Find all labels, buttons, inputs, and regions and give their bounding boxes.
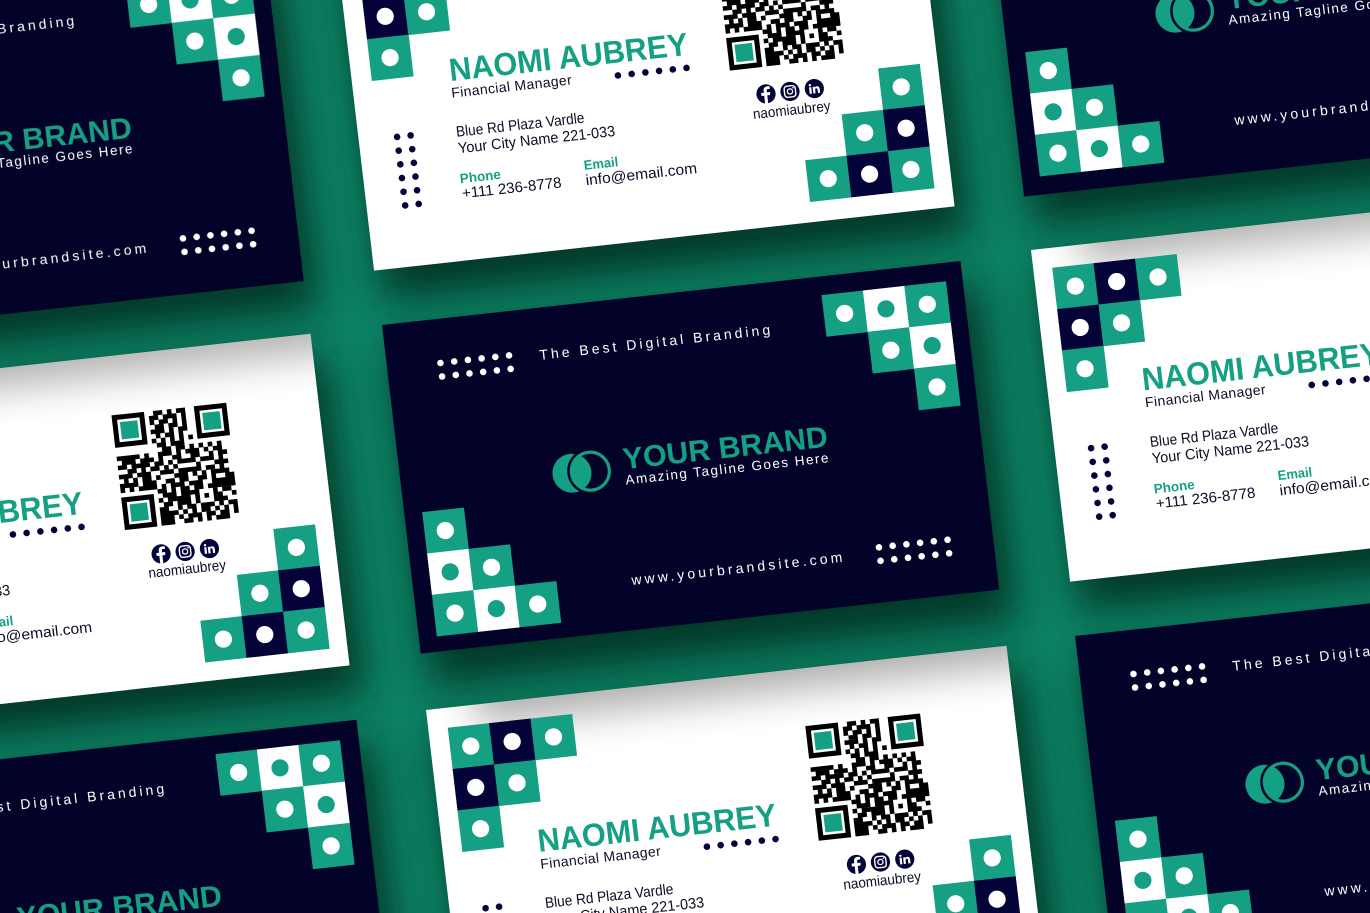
logo mark bbox=[550, 447, 614, 497]
white card: bottom centre bbox=[426, 646, 1038, 913]
dots row bbox=[9, 523, 85, 538]
QR code bbox=[717, 0, 844, 68]
dots: top bbox=[1130, 663, 1207, 691]
tile cluster: bottom right bbox=[795, 64, 935, 202]
white card: top centre bbox=[335, 0, 955, 271]
card face bbox=[1075, 572, 1370, 913]
dark card: top left bbox=[0, 0, 303, 345]
logo mark bbox=[1243, 758, 1307, 808]
website: www.yourbrandsite.com bbox=[629, 549, 843, 588]
card face bbox=[335, 0, 955, 271]
tile cluster: top right bbox=[216, 740, 355, 878]
address line 2: Your City Name 221-033 bbox=[1151, 433, 1310, 467]
tile cluster: bottom left bbox=[422, 498, 561, 637]
tagline: top: The Best Digital Branding bbox=[538, 321, 771, 363]
email label: Email bbox=[1277, 464, 1313, 483]
white card: left bbox=[0, 334, 350, 704]
job title: Financial Manager bbox=[539, 843, 662, 872]
cast shadow on card bbox=[1060, 212, 1370, 277]
tile cluster: bottom left bbox=[1025, 38, 1164, 177]
address line 2: Your City Name 221-033 bbox=[457, 123, 616, 157]
white card: right bbox=[1031, 212, 1370, 582]
dots: bottom bbox=[179, 227, 257, 255]
email address: info@email.com bbox=[585, 160, 698, 189]
dots: top bbox=[437, 352, 514, 380]
cast shadow on card bbox=[0, 334, 316, 412]
social icons bbox=[150, 538, 220, 565]
brand name: YOUR BRAND bbox=[621, 421, 830, 476]
social handle: naomiaubrey bbox=[752, 98, 832, 123]
address line 1: Blue Rd Plaza Vardle bbox=[544, 881, 674, 912]
phone number: +111 236-8778 bbox=[1155, 485, 1256, 512]
dots column bbox=[1087, 443, 1116, 520]
card face bbox=[0, 720, 396, 913]
address line 1: Blue Rd Plaza Vardle bbox=[1149, 420, 1279, 451]
job title: Financial Manager bbox=[1144, 381, 1267, 410]
QR code bbox=[112, 405, 239, 528]
tile cluster: top left bbox=[1052, 254, 1191, 392]
dots: bottom bbox=[875, 536, 953, 564]
phone label: Phone bbox=[1153, 477, 1196, 496]
social handle: naomiaubrey bbox=[148, 557, 228, 582]
tile cluster: bottom right bbox=[191, 524, 330, 662]
brand tagline: Amazing Tagline Goes Here bbox=[625, 450, 829, 488]
QR code bbox=[806, 716, 933, 838]
person name: NAOMI AUBREY bbox=[447, 26, 690, 88]
email label: Email bbox=[583, 154, 619, 173]
cast shadow on card bbox=[454, 646, 1012, 738]
dots row bbox=[1308, 374, 1370, 389]
dark card: centre bbox=[382, 261, 999, 654]
phone label: Phone bbox=[459, 167, 502, 186]
social icons bbox=[755, 78, 825, 105]
tile cluster: bottom right bbox=[886, 835, 1026, 913]
tile cluster: top left bbox=[357, 0, 496, 81]
card face bbox=[426, 646, 1046, 913]
card face bbox=[0, 0, 303, 345]
logo mark bbox=[1153, 0, 1217, 37]
tile cluster: top right bbox=[126, 0, 265, 110]
tile cluster: top right bbox=[822, 281, 961, 419]
logo mark bbox=[0, 906, 8, 913]
social handle: naomiaubrey bbox=[842, 869, 923, 894]
tile cluster: bottom left bbox=[1115, 807, 1254, 913]
card face bbox=[0, 334, 350, 730]
dots row bbox=[703, 835, 779, 850]
address line 1: Blue Rd Plaza Vardle bbox=[455, 110, 585, 141]
tile cluster: top left bbox=[448, 714, 587, 852]
card face bbox=[382, 261, 999, 654]
dots column bbox=[482, 903, 511, 913]
person name: NAOMI AUBREY bbox=[535, 797, 778, 859]
dark card: bottom right bbox=[1075, 572, 1370, 913]
dark card: bottom left bbox=[0, 720, 396, 913]
dots row bbox=[614, 64, 690, 79]
dark card: top right bbox=[985, 0, 1370, 197]
social icons bbox=[846, 849, 915, 875]
card face bbox=[985, 0, 1370, 197]
job title: Financial Manager bbox=[450, 71, 573, 101]
phone number: +111 236-8778 bbox=[461, 174, 562, 202]
card face bbox=[1031, 186, 1370, 582]
dots column bbox=[393, 132, 422, 209]
